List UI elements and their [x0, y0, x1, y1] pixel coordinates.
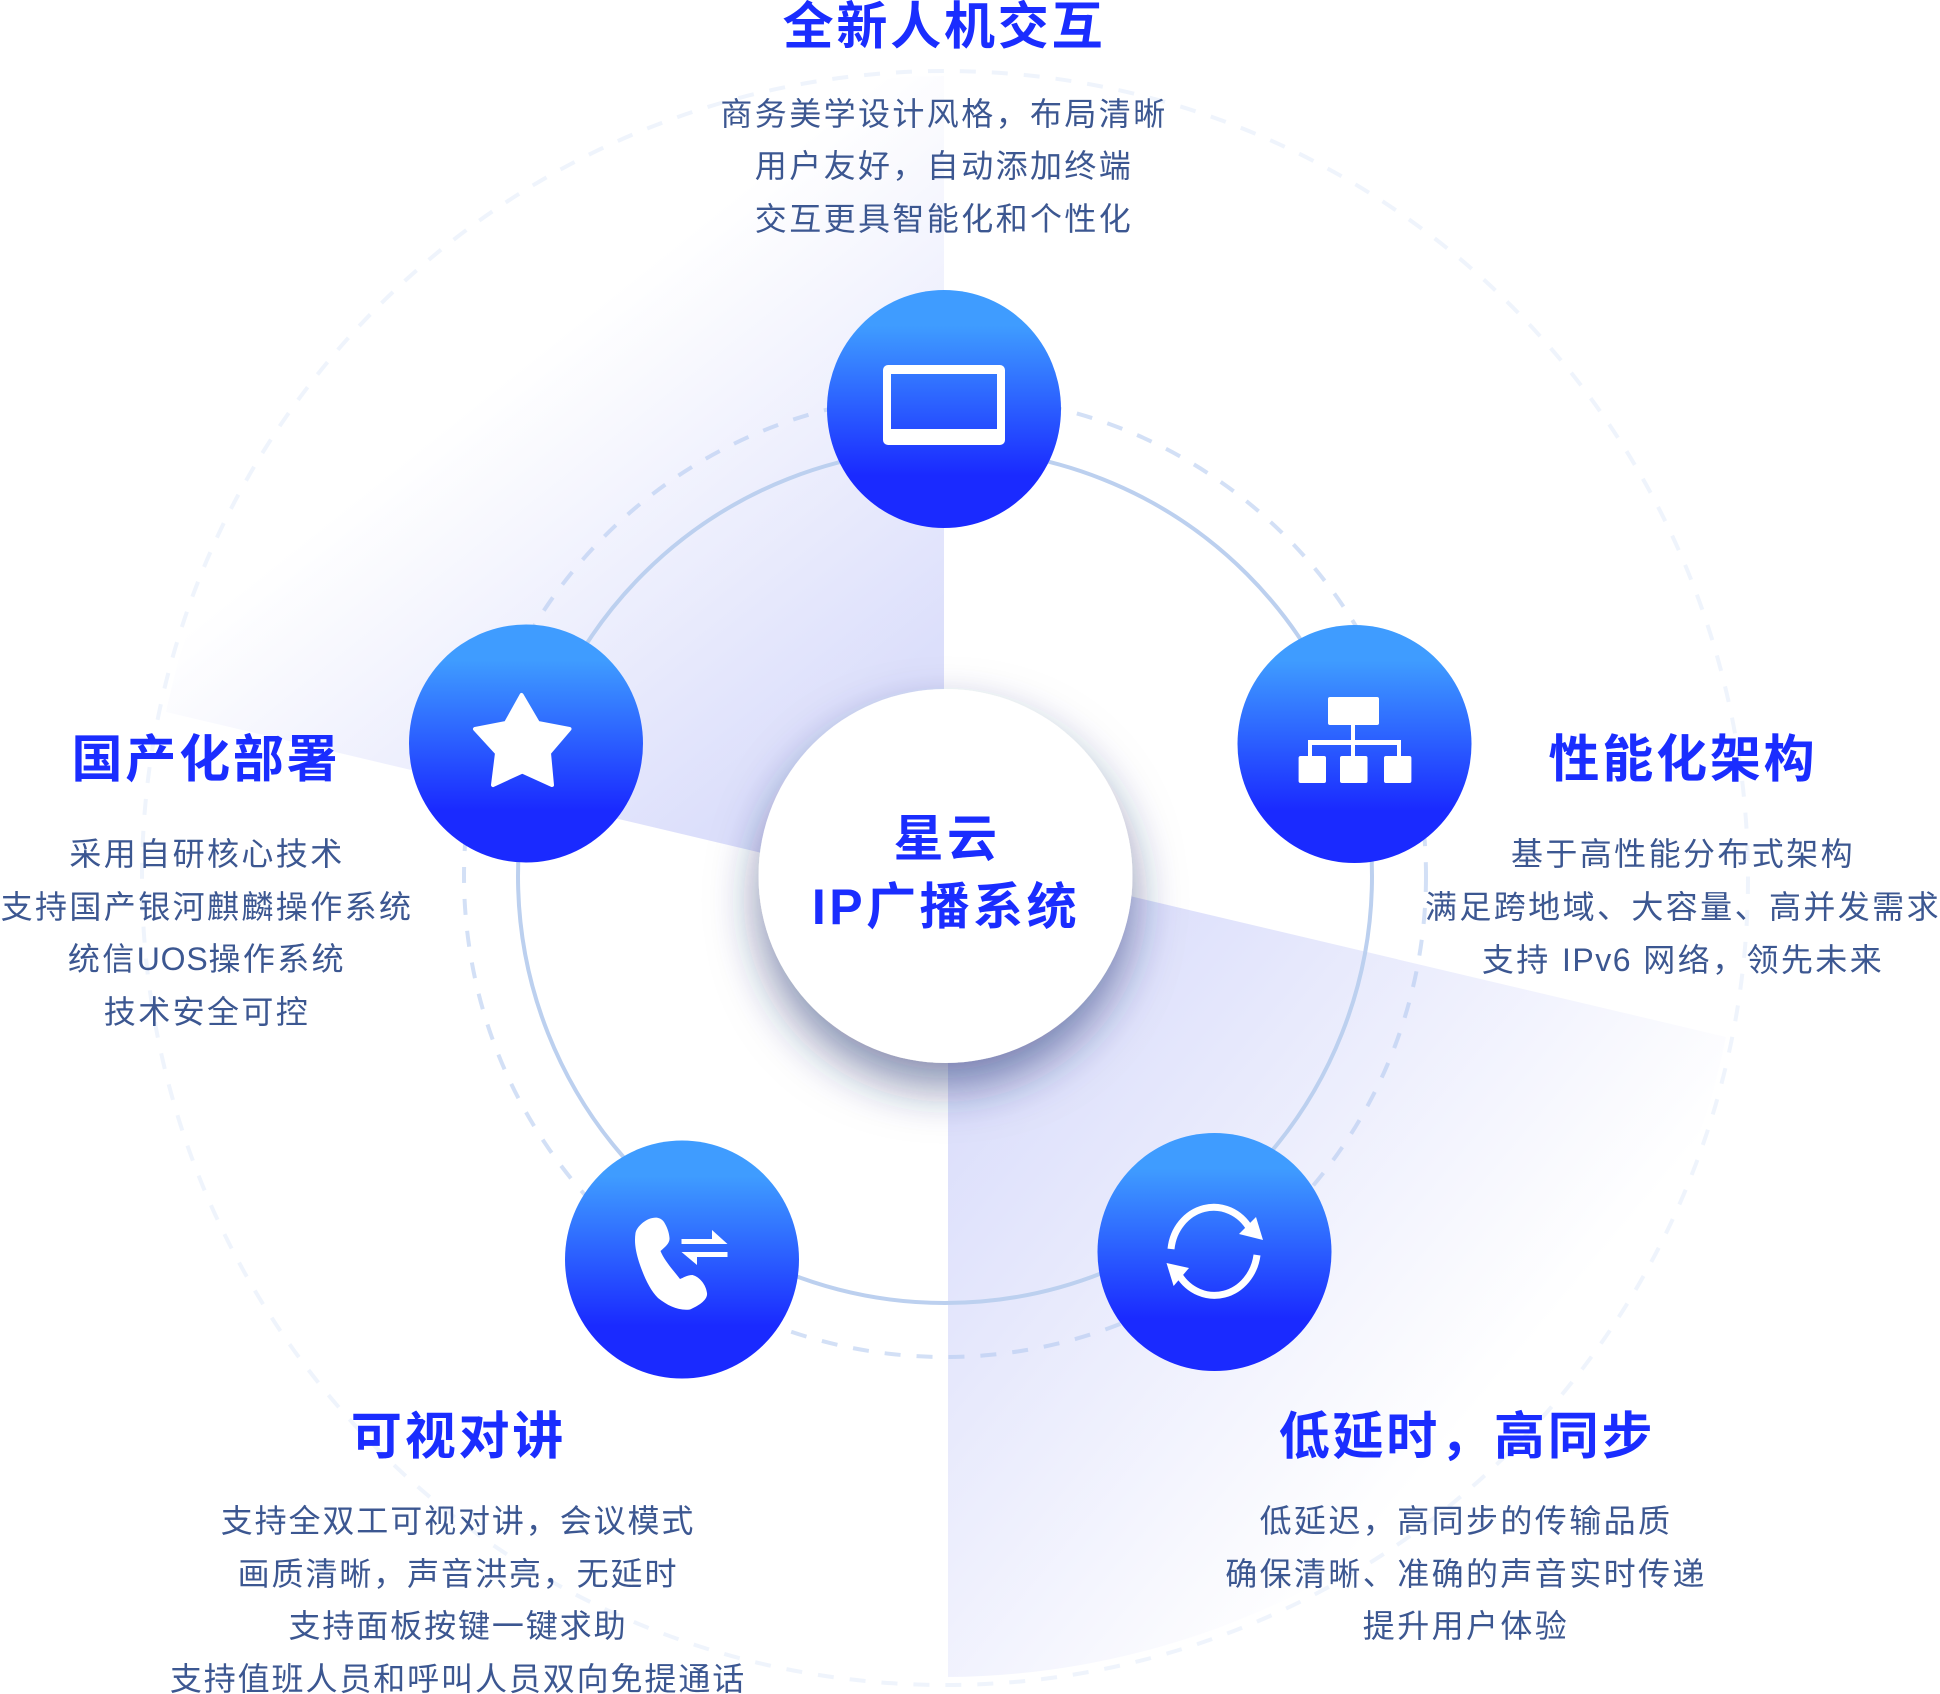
heading: 国产化部署: [71, 731, 341, 788]
text block: bottom right: [1225, 1408, 1707, 1644]
text block: bottom right: 确保清晰、准确的声音实时传递: [1225, 1556, 1707, 1592]
text block: top: 用户友好，自动添加终端: [755, 148, 1133, 184]
node: right, performance architecture: [1238, 625, 1472, 863]
text block: top: [720, 0, 1168, 237]
node: left, localized deployment: [409, 624, 643, 862]
text block: right: 满足跨地域、大容量、高并发需求: [1425, 889, 1940, 925]
middle dashed ring: [464, 395, 1426, 1357]
node: top, human-machine interaction: [827, 290, 1061, 528]
icon: phone with arrows: [635, 1218, 728, 1310]
heading: 性能化架构: [1548, 731, 1818, 788]
heading: 低延时，高同步: [1279, 1408, 1655, 1465]
icon: sync arrows: [1166, 1207, 1263, 1295]
text block: bottom left: [170, 1408, 746, 1694]
outer dashed ring: [142, 71, 1748, 1685]
text block: left: [1, 731, 413, 1030]
center hub: [758, 689, 1132, 1063]
background wedge: lower right: [948, 853, 1726, 1677]
hub title line 1: 星云: [894, 811, 1000, 867]
node: bottom left, video intercom: [565, 1140, 799, 1378]
text block: bottom left: 支持面板按键一键求助: [288, 1608, 628, 1644]
text block: right: 基于高性能分布式架构: [1511, 836, 1855, 872]
background wedge: upper left: [166, 76, 944, 896]
text block: left: 技术安全可控: [104, 994, 310, 1030]
text block: right: 支持 IPv6 网络，领先未来: [1482, 942, 1884, 978]
icon: network hierarchy: [1299, 697, 1411, 783]
text block: bottom left: 画质清晰，声音洪亮，无延时: [238, 1556, 678, 1592]
text block: left: 支持国产银河麒麟操作系统: [1, 889, 413, 925]
icon: star: [475, 695, 570, 785]
text block: right: [1425, 731, 1940, 978]
text block: bottom right: 低延迟，高同步的传输品质: [1260, 1503, 1672, 1539]
text block: bottom right: 提升用户体验: [1363, 1608, 1569, 1644]
icon: screen: [883, 365, 1005, 445]
node: bottom right, low latency: [1098, 1133, 1332, 1371]
inner solid ring: [518, 449, 1372, 1303]
text block: top: 交互更具智能化和个性化: [755, 201, 1133, 237]
text block: top: 商务美学设计风格，布局清晰: [720, 96, 1168, 132]
text block: left: 采用自研核心技术: [69, 836, 345, 872]
text block: bottom left: 支持全双工可视对讲，会议模式: [221, 1503, 695, 1539]
hub title line 2: IP广播系统: [812, 879, 1080, 935]
text block: left: 统信UOS操作系统: [68, 941, 346, 977]
heading: 可视对讲: [351, 1408, 566, 1465]
